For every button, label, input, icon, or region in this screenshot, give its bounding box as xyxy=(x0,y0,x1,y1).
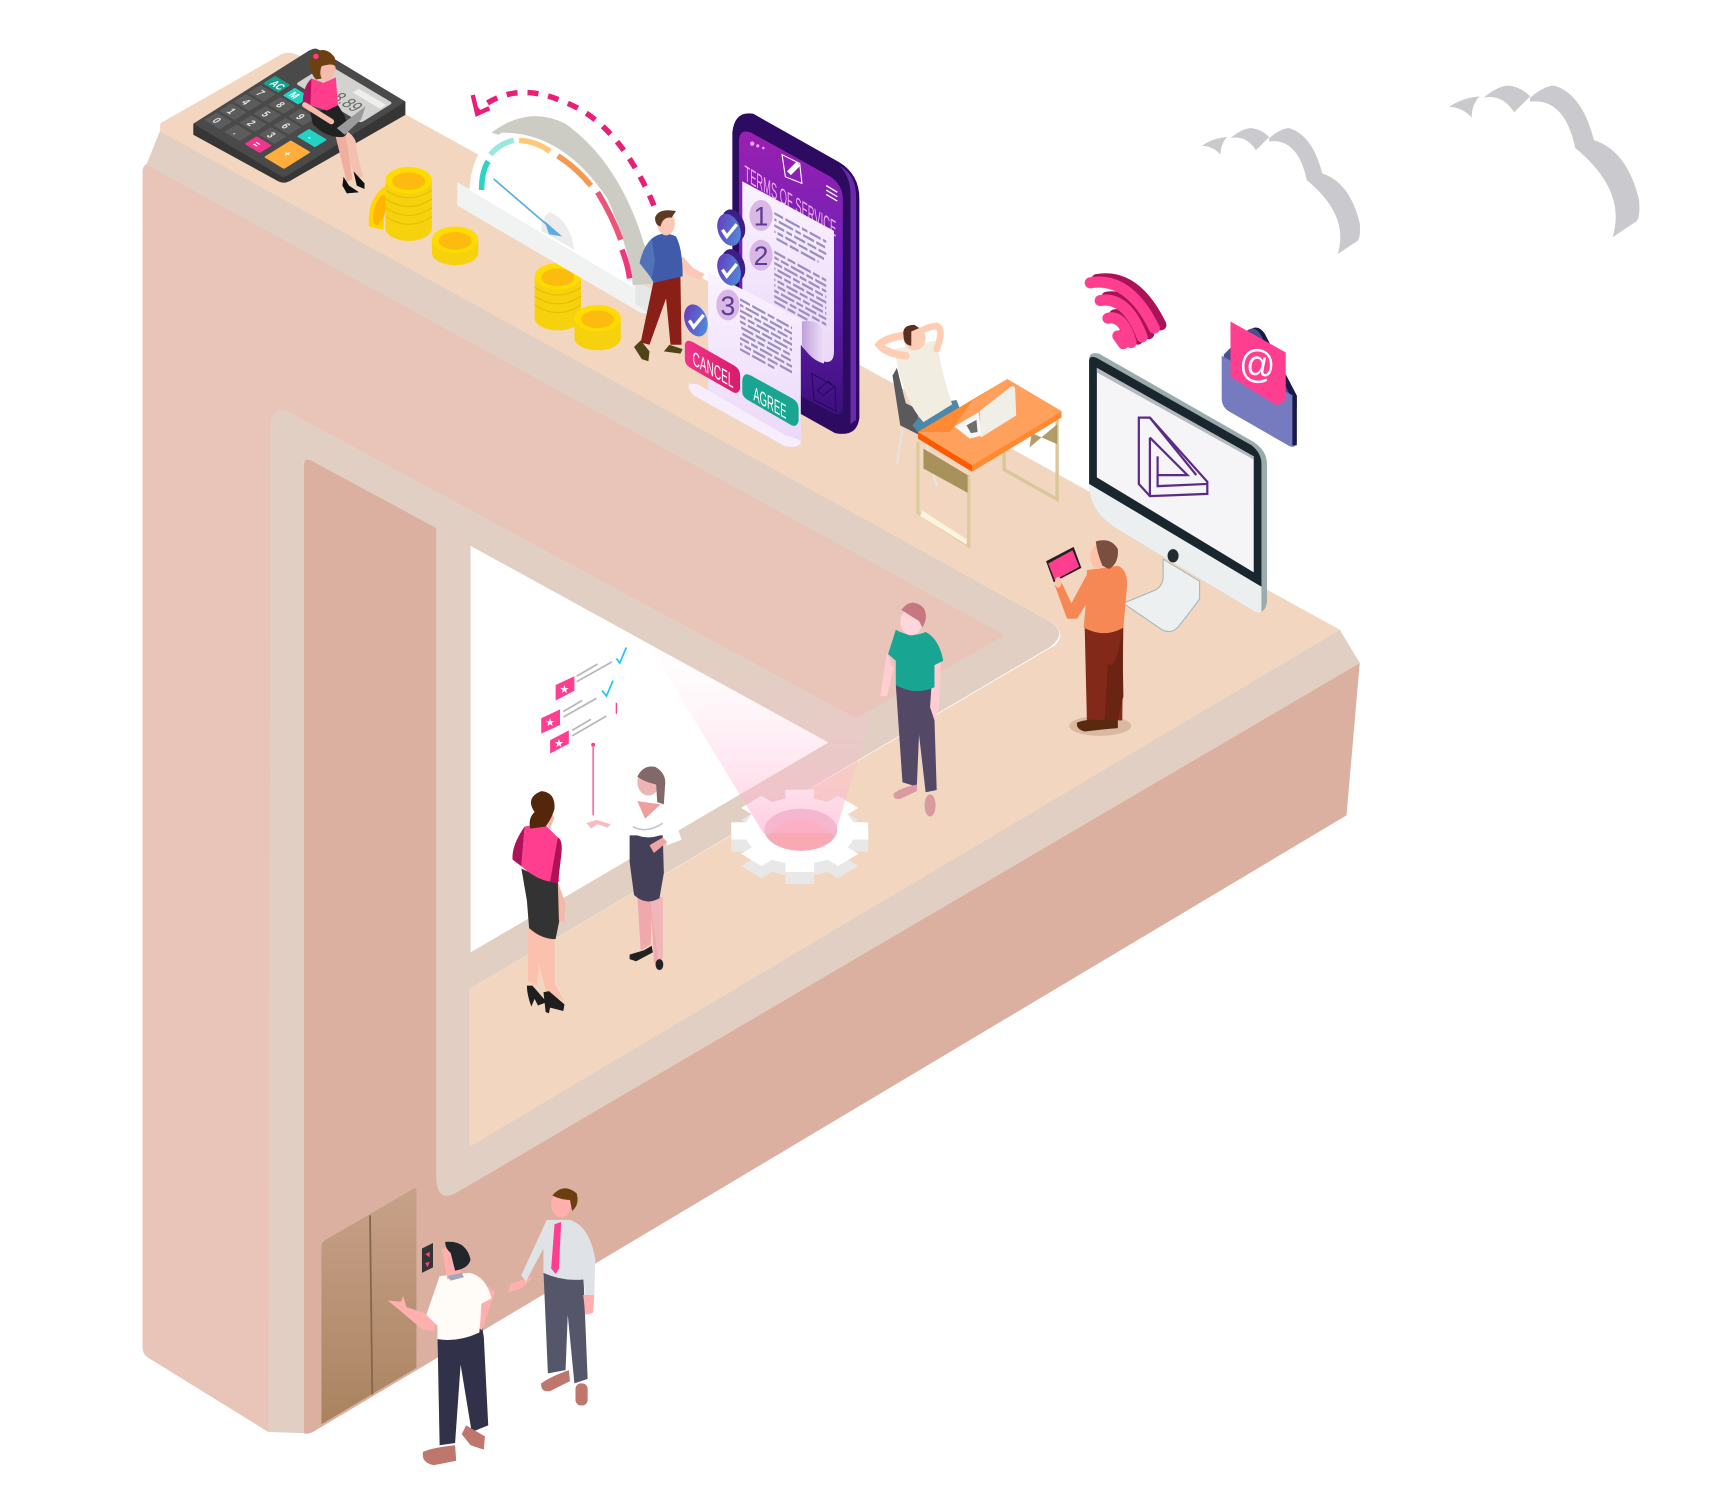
icon: calculator: 4 xyxy=(238,98,253,107)
icon: calculator: 2 xyxy=(243,119,258,128)
icon: calculator: 3 xyxy=(263,131,278,140)
agree button xyxy=(742,374,799,426)
numbered badges: 1 xyxy=(754,201,768,231)
icon: calculator: - xyxy=(303,134,316,142)
icon: calculator: 9 xyxy=(292,113,307,122)
icon: elevator doors xyxy=(321,1188,433,1424)
person: man with pink tie xyxy=(508,1188,595,1405)
person: man relaxing on chair xyxy=(879,325,963,486)
projection light beam xyxy=(646,641,873,833)
checklist hologram: ★ xyxy=(545,717,555,729)
icon: gear xyxy=(731,790,868,884)
icon: calculator: 6 xyxy=(278,122,293,131)
phone footer icon xyxy=(812,373,836,411)
check marks xyxy=(602,647,626,696)
icon: desktop monitor xyxy=(1089,353,1267,632)
elevator buttons xyxy=(422,1243,433,1273)
person: man in blue sweater xyxy=(634,210,705,361)
icon: coin stacks xyxy=(369,167,621,350)
icon: email envelope xyxy=(1222,322,1297,447)
person: woman in white blouse xyxy=(630,766,682,970)
paper text lines xyxy=(774,213,826,330)
numbered badges xyxy=(716,200,773,321)
icon: phone with terms of service xyxy=(680,113,859,447)
icon: phone with terms of service: TERMS OF SERVICE xyxy=(744,161,836,242)
icon: calculator: 1 xyxy=(223,107,238,116)
structure: impossible triangle body xyxy=(142,53,1360,1434)
monitor stand xyxy=(1123,559,1200,632)
checklist hologram: ★ xyxy=(560,684,570,696)
person: man in white shirt xyxy=(388,1242,495,1465)
logo on screen xyxy=(1139,418,1207,496)
icon: calculator: 0 xyxy=(209,116,224,126)
icon: calculator: 5 xyxy=(258,110,273,119)
icon: email envelope: @ xyxy=(1239,341,1275,389)
paper lower text lines xyxy=(740,299,792,378)
person: man in teal shirt xyxy=(880,603,943,817)
icon: calculator: 8 xyxy=(272,101,287,110)
phone header icons xyxy=(750,141,837,201)
checklist hologram xyxy=(541,647,626,829)
numbered badges: 2 xyxy=(754,241,768,271)
checklist hologram: ★ xyxy=(554,738,564,750)
icon: calculator: 8.89 xyxy=(327,90,367,115)
icon: calculator: M xyxy=(285,91,302,101)
icon: orange desk with laptop xyxy=(918,379,1062,546)
laptop xyxy=(954,386,1016,439)
icon: calculator: 7 xyxy=(252,89,267,98)
icon: calculator: . xyxy=(229,129,242,137)
cloud right xyxy=(1449,86,1639,237)
icon: calculator xyxy=(193,48,405,183)
icon: calculator: = xyxy=(248,140,263,149)
cancel button: CANCEL xyxy=(693,347,733,393)
icon: calculator: AC xyxy=(266,79,287,92)
icon: speed gauge xyxy=(457,116,654,315)
cancel button xyxy=(685,341,740,393)
pole xyxy=(591,743,595,747)
arrow: dashed gauge arrow xyxy=(473,92,654,206)
person: woman sitting on calculator xyxy=(303,50,366,193)
icon: calculator: + xyxy=(279,150,294,159)
agree button: AGREE xyxy=(753,382,786,424)
person: man in orange with tablet xyxy=(1046,540,1131,736)
person: woman with pink jacket xyxy=(512,791,566,1013)
icon: wifi symbol xyxy=(1090,279,1161,344)
gray text lines xyxy=(563,662,612,736)
cloud left xyxy=(1202,128,1360,254)
numbered badges: 3 xyxy=(721,291,735,321)
rating cards xyxy=(541,676,574,754)
check badges xyxy=(680,206,749,340)
